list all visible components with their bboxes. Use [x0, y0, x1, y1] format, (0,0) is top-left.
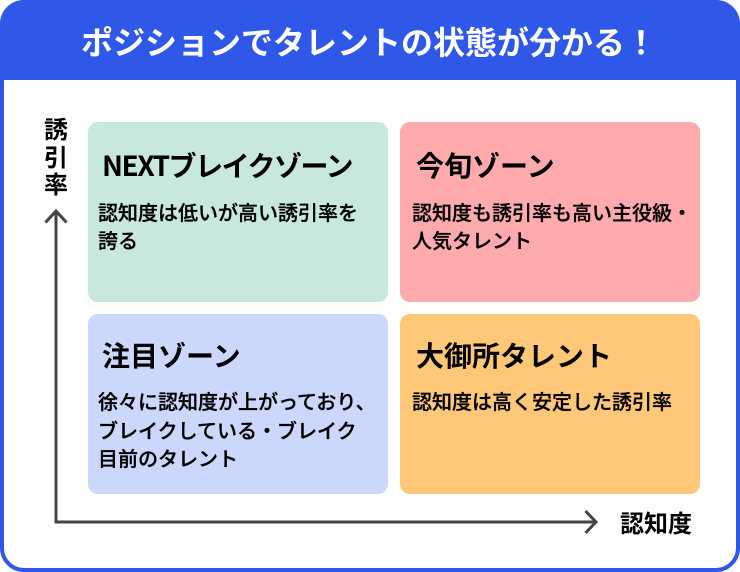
- heading: 注目ゾーン: [102, 335, 241, 375]
- text block: 認知度は低いが高い誘引率を: [98, 196, 358, 226]
- text block: 認知度も誘引率も高い主役級・: [412, 196, 692, 226]
- panel: veteran talent: [400, 314, 700, 494]
- y axis label: 誘: [44, 110, 68, 145]
- y axis label: [44, 110, 68, 200]
- panel: attention zone: [88, 314, 388, 494]
- text block: [412, 196, 692, 254]
- text block: 誇る: [98, 225, 138, 254]
- heading: NEXTブレイクゾーン: [102, 145, 352, 185]
- x axis label: 認知度: [620, 504, 692, 539]
- text block: 認知度は高く安定した誘引率: [412, 386, 672, 415]
- text block: [98, 196, 358, 254]
- heading: 大御所タレント: [416, 335, 612, 375]
- text block: ブレイクしている・ブレイク: [98, 414, 357, 444]
- y axis label: 引: [44, 138, 68, 172]
- text block: 人気タレント: [412, 225, 532, 254]
- text block: 目前のタレント: [98, 443, 238, 472]
- title banner: [0, 0, 740, 80]
- text block: 徐々に認知度が上がっており、: [98, 386, 376, 415]
- panel: NEXT break zone: [88, 122, 388, 302]
- y axis label: 率: [44, 165, 68, 200]
- heading: 今旬ゾーン: [416, 145, 555, 185]
- text block: [98, 386, 376, 472]
- panel: current zone: [400, 122, 700, 302]
- title: ポジションでタレントの状態が分かる！: [81, 18, 657, 64]
